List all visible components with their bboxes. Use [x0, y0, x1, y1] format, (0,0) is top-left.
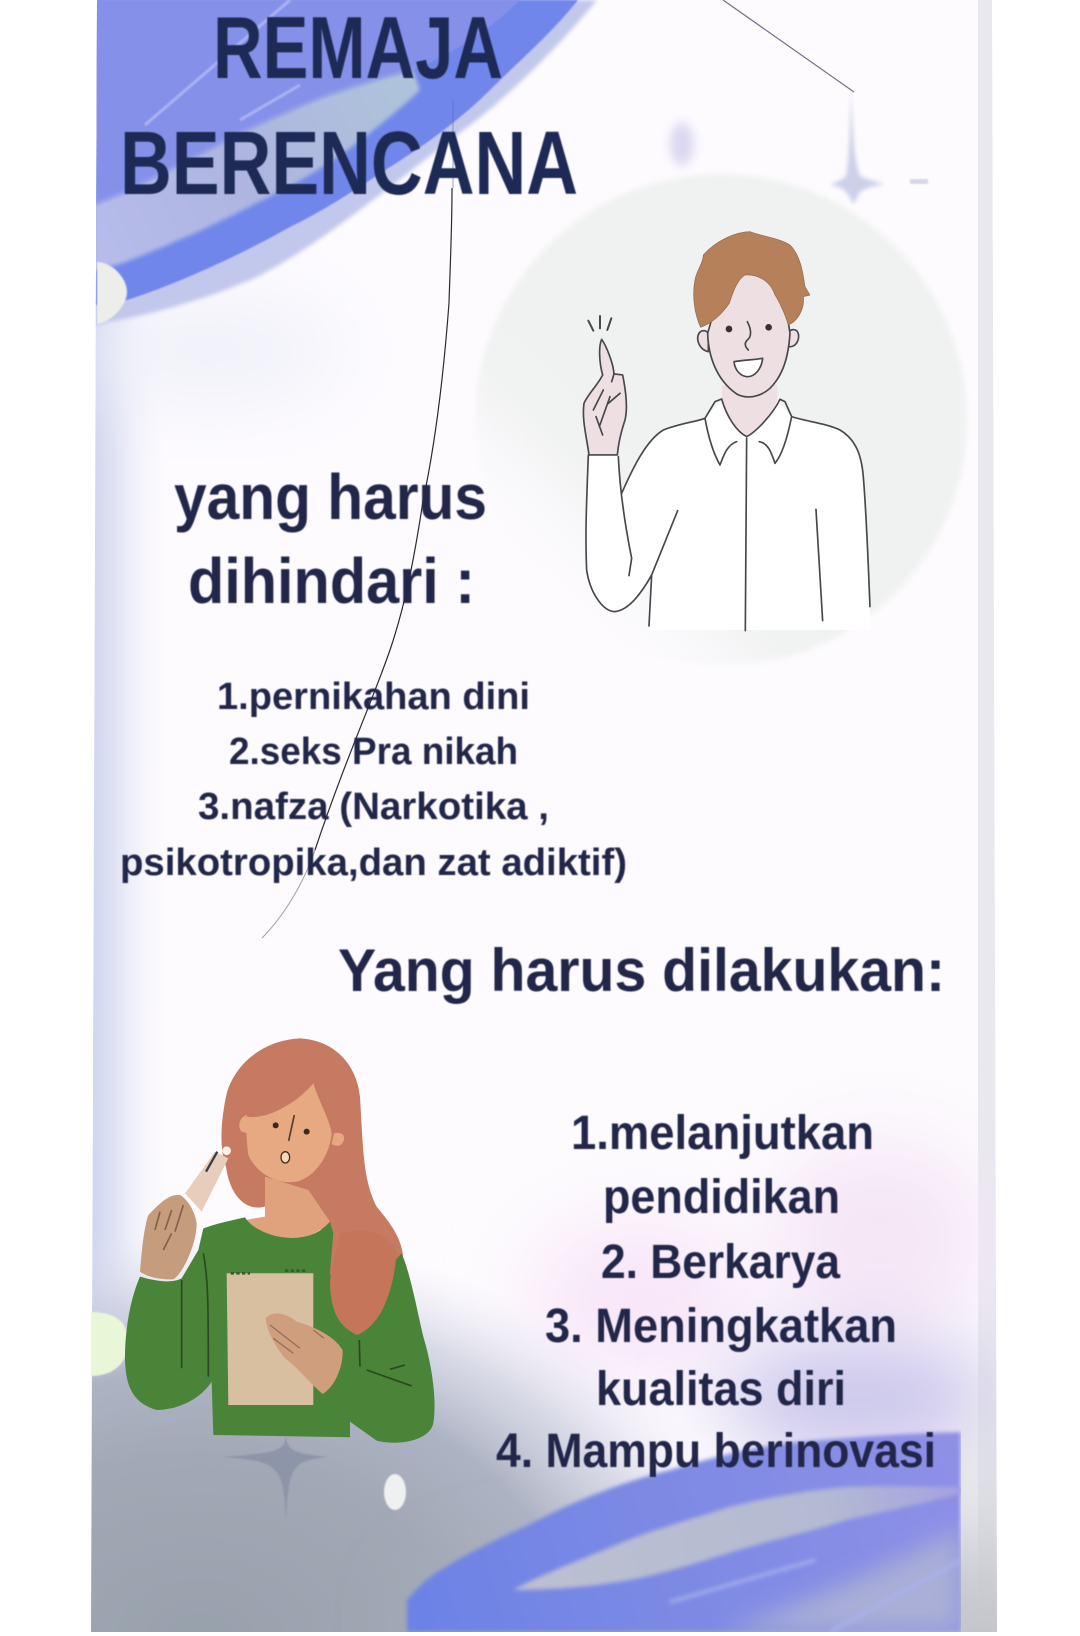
neck [245, 1177, 330, 1239]
shirt [586, 400, 870, 631]
list: things to avoid: 2.seks Pra nikah [229, 731, 518, 773]
periwinkle corner [91, 0, 520, 206]
outer lavender fade [91, 0, 597, 326]
pencil [185, 1146, 231, 1212]
list: things to do: 2. Berkarya [601, 1236, 840, 1289]
finger lines on notepad [270, 1325, 324, 1353]
decorative blue swoosh: top left [91, 0, 597, 326]
bright blue band [91, 0, 578, 306]
title: REMAJA [213, 0, 503, 97]
long hair [221, 1038, 403, 1337]
ears [698, 330, 799, 352]
smile [734, 358, 763, 377]
decorative white blob, bottom [384, 1474, 406, 1510]
pale lens [91, 70, 420, 272]
eyes [726, 324, 772, 332]
raised hand [140, 1195, 197, 1279]
list: things to avoid: 1.pernikahan dini [217, 676, 530, 718]
sleeve folds [182, 1253, 412, 1386]
eyes, nose and mouth [273, 1115, 310, 1163]
list: things to do: 1.melanjutkan [571, 1107, 874, 1160]
decorative blue swoosh: bottom right [407, 1432, 961, 1632]
list: things to do: 4. Mampu berinovasi [496, 1425, 936, 1478]
decorative lavender spot [670, 122, 694, 166]
title [120, 0, 578, 214]
heading: yang harus dihindari: dihindari : [188, 545, 475, 617]
hand on notepad [266, 1313, 343, 1394]
ears [239, 1115, 344, 1146]
decorative sparkle under the woman [221, 1436, 328, 1520]
face [708, 267, 790, 397]
list: things to avoid [120, 676, 627, 884]
list: things to avoid: psikotropika,dan zat adiktif) [120, 842, 627, 884]
hair [694, 232, 810, 327]
heading: yang harus dilakukan: Yang harus dilakukan: [338, 937, 945, 1004]
hand finger lines [155, 1205, 183, 1250]
list: things to avoid: 3.nafza (Narkotika , [198, 786, 549, 828]
illustration: man pointing up [583, 232, 870, 631]
sparkle marks [588, 316, 611, 331]
decorative light-green blob, left edge [91, 1312, 128, 1376]
list: things to do: 3. Meningkatkan [545, 1300, 897, 1353]
decorative white blob, left edge [97, 262, 127, 324]
background circle behind man [475, 174, 967, 666]
heading: yang harus dihindari: yang harus [174, 461, 487, 533]
list: things to do [496, 1107, 936, 1478]
notepad [227, 1273, 313, 1405]
collar [705, 399, 792, 465]
decorative thread and sparkle, top right [723, 0, 928, 204]
face [246, 1083, 332, 1182]
title: BERENCANA [120, 114, 578, 214]
nose [745, 322, 751, 350]
sweater [125, 1217, 435, 1443]
hand [583, 339, 626, 455]
light streaks [145, 0, 300, 125]
decorative hairline crack [262, 100, 453, 938]
finger lines [593, 374, 620, 435]
neck [722, 385, 777, 437]
list: things to do: kualitas diri [596, 1363, 846, 1416]
list: things to do: pendidikan [603, 1171, 840, 1224]
heading: yang harus dihindari [174, 461, 487, 617]
illustration: woman with notepad [125, 1038, 435, 1443]
hair over shoulder [330, 1231, 397, 1335]
notepad binding [231, 1271, 306, 1273]
